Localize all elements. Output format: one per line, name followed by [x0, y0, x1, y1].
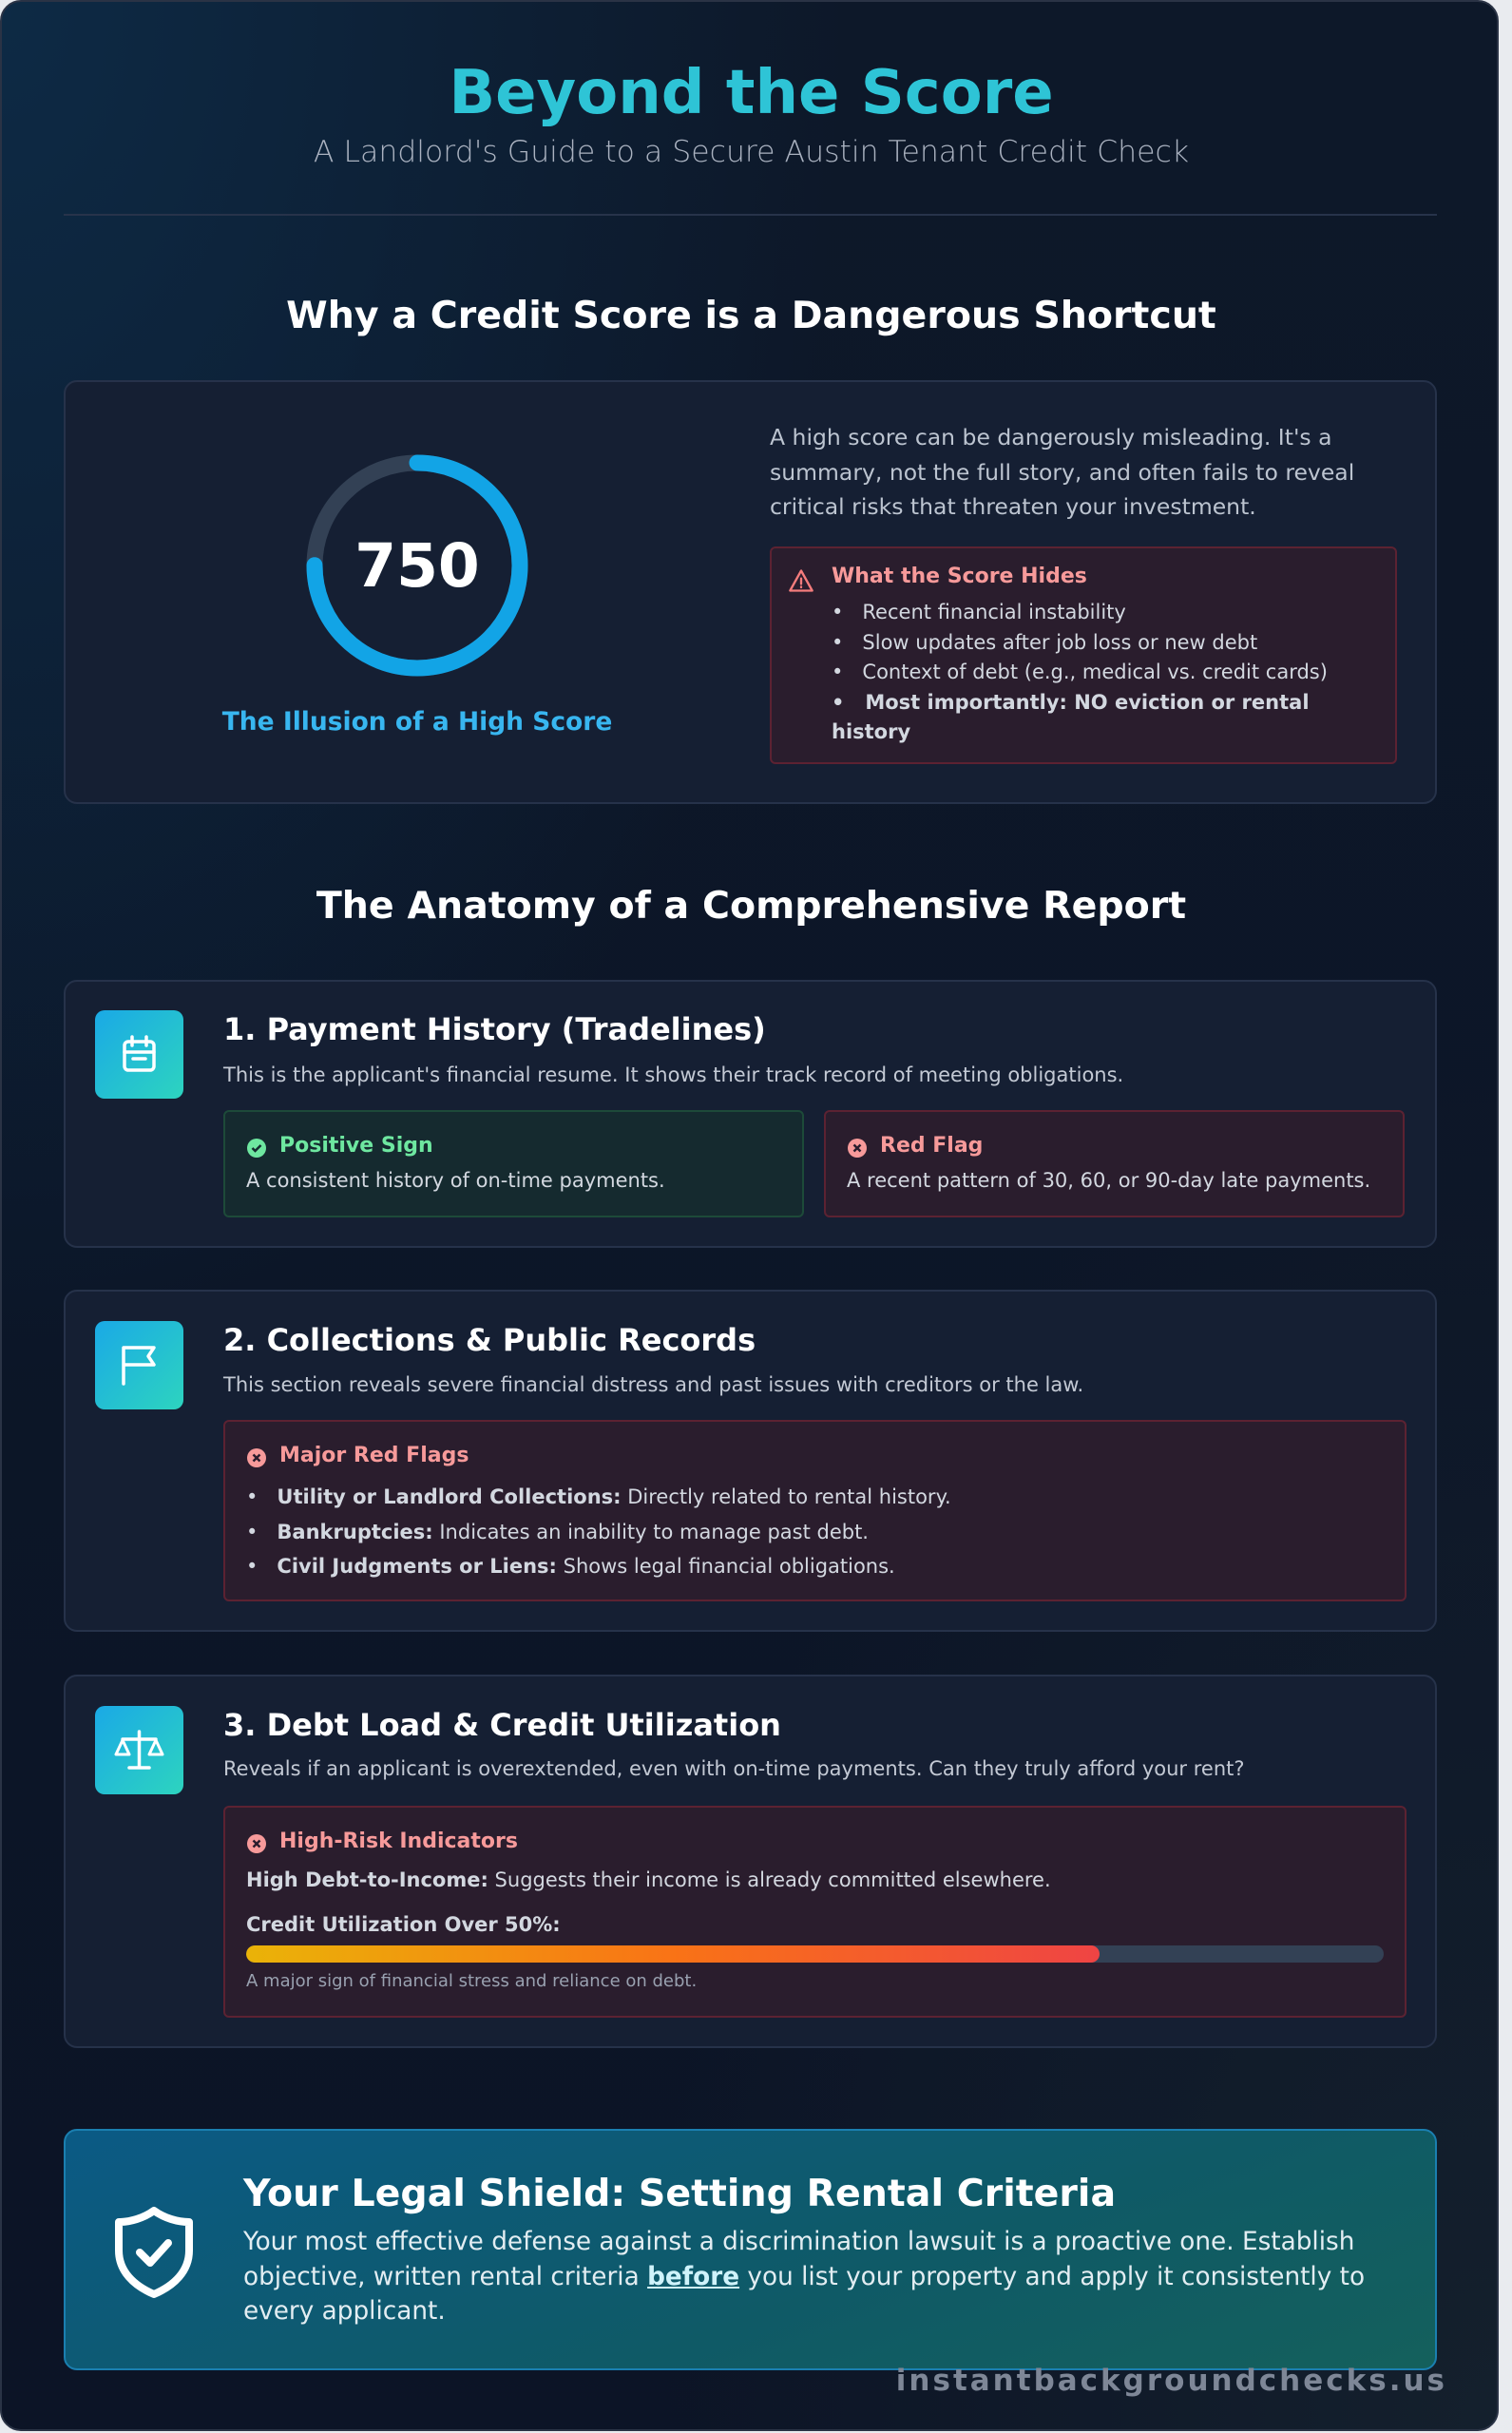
- callout: high-risk indicators: High-Risk Indicators: [279, 1830, 518, 1853]
- callout: major red flags: Major Red Flags: [279, 1444, 469, 1467]
- panel: collections: 2. Collections & Public Records: [223, 1322, 756, 1358]
- gauge chart: [306, 454, 528, 677]
- panel: collections: [64, 1290, 1437, 1632]
- panel: debt load: 3. Debt Load & Credit Utilization: [223, 1707, 781, 1743]
- panel: collections: This section reveals severe financial distress and past issues with creditors or the law.: [223, 1373, 1083, 1396]
- callout: what the score hides: • Context of debt (e.g., medical vs. credit cards): [832, 661, 1328, 683]
- gauge chart: 750: [354, 531, 480, 601]
- title: Beyond the Score: [449, 58, 1054, 128]
- callout: positive sign: [223, 1110, 804, 1217]
- callout: legal shield: Your most effective defense against a discrimination lawsuit is a proactive one. Establish objective, written rental criteria before you list your property and apply it consistently to every applicant.: [243, 2228, 1365, 2326]
- callout: what the score hides: • Slow updates after job loss or new debt: [832, 631, 1257, 654]
- bar chart: utilization: [246, 1945, 1384, 1963]
- icon: scales: [95, 1706, 183, 1794]
- callout: what the score hides: • Recent financial instability: [832, 601, 1126, 623]
- callout: red flag: [824, 1110, 1405, 1217]
- callout: major red flags: • Civil Judgments or Liens: Shows legal financial obligations.: [246, 1555, 895, 1578]
- heading: anatomy: The Anatomy of a Comprehensive Report: [316, 884, 1186, 928]
- panel: payment history: 1. Payment History (Tradelines): [223, 1011, 766, 1047]
- callout: high-risk indicators: A major sign of financial stress and reliance on debt.: [246, 1971, 697, 1991]
- callout: legal shield: Your Legal Shield: Setting Rental Criteria: [243, 2172, 1116, 2215]
- callout: high-risk indicators: Credit Utilization Over 50%:: [246, 1913, 561, 1936]
- callout: major red flags: [223, 1420, 1407, 1601]
- callout: red flag: A recent pattern of 30, 60, or 90-day late payments.: [847, 1169, 1370, 1192]
- icon: flag: [95, 1321, 183, 1409]
- subtitle: A Landlord's Guide to a Secure Austin Tenant Credit Check: [314, 135, 1189, 169]
- callout: what the score hides: [770, 546, 1397, 764]
- callout: legal shield: [64, 2129, 1437, 2370]
- callout: major red flags: • Bankruptcies: Indicates an inability to manage past debt.: [246, 1521, 869, 1543]
- icon: shield: [115, 2207, 193, 2298]
- icon: calendar: [95, 1010, 183, 1099]
- callout: high-risk indicators: High Debt-to-Income: Suggests their income is already committed elsewhere.: [246, 1868, 1051, 1891]
- intro text: A high score can be dangerously misleading. It's a summary, not the full story, and often fails to reveal critical risks that threaten your investment.: [770, 424, 1354, 520]
- heading: why credit score: Why a Credit Score is a Dangerous Shortcut: [286, 294, 1216, 337]
- panel: payment history: [64, 980, 1437, 1248]
- callout: major red flags: • Utility or Landlord Collections: Directly related to rental history.: [246, 1485, 951, 1508]
- gauge caption: The Illusion of a High Score: [222, 707, 612, 737]
- footer: website: instantbackgroundchecks.us: [896, 2364, 1447, 2398]
- callout: what the score hides: • Most importantly: NO eviction or rental history: [832, 690, 1310, 743]
- callout: positive sign: Positive Sign: [279, 1134, 433, 1158]
- panel: debt load: Reveals if an applicant is overextended, even with on-time payments. Can they truly afford your rent?: [223, 1757, 1245, 1780]
- callout: high-risk indicators: [223, 1806, 1407, 2018]
- panel: payment history: This is the applicant's financial resume. It shows their track record of meeting obligations.: [223, 1063, 1123, 1086]
- callout: what the score hides: What the Score Hides: [832, 565, 1087, 588]
- callout: positive sign: A consistent history of on-time payments.: [246, 1169, 665, 1192]
- callout: red flag: Red Flag: [880, 1134, 983, 1158]
- icon: warning: [789, 569, 813, 592]
- panel: credit score: [64, 380, 1437, 804]
- panel: debt load: [64, 1675, 1437, 2048]
